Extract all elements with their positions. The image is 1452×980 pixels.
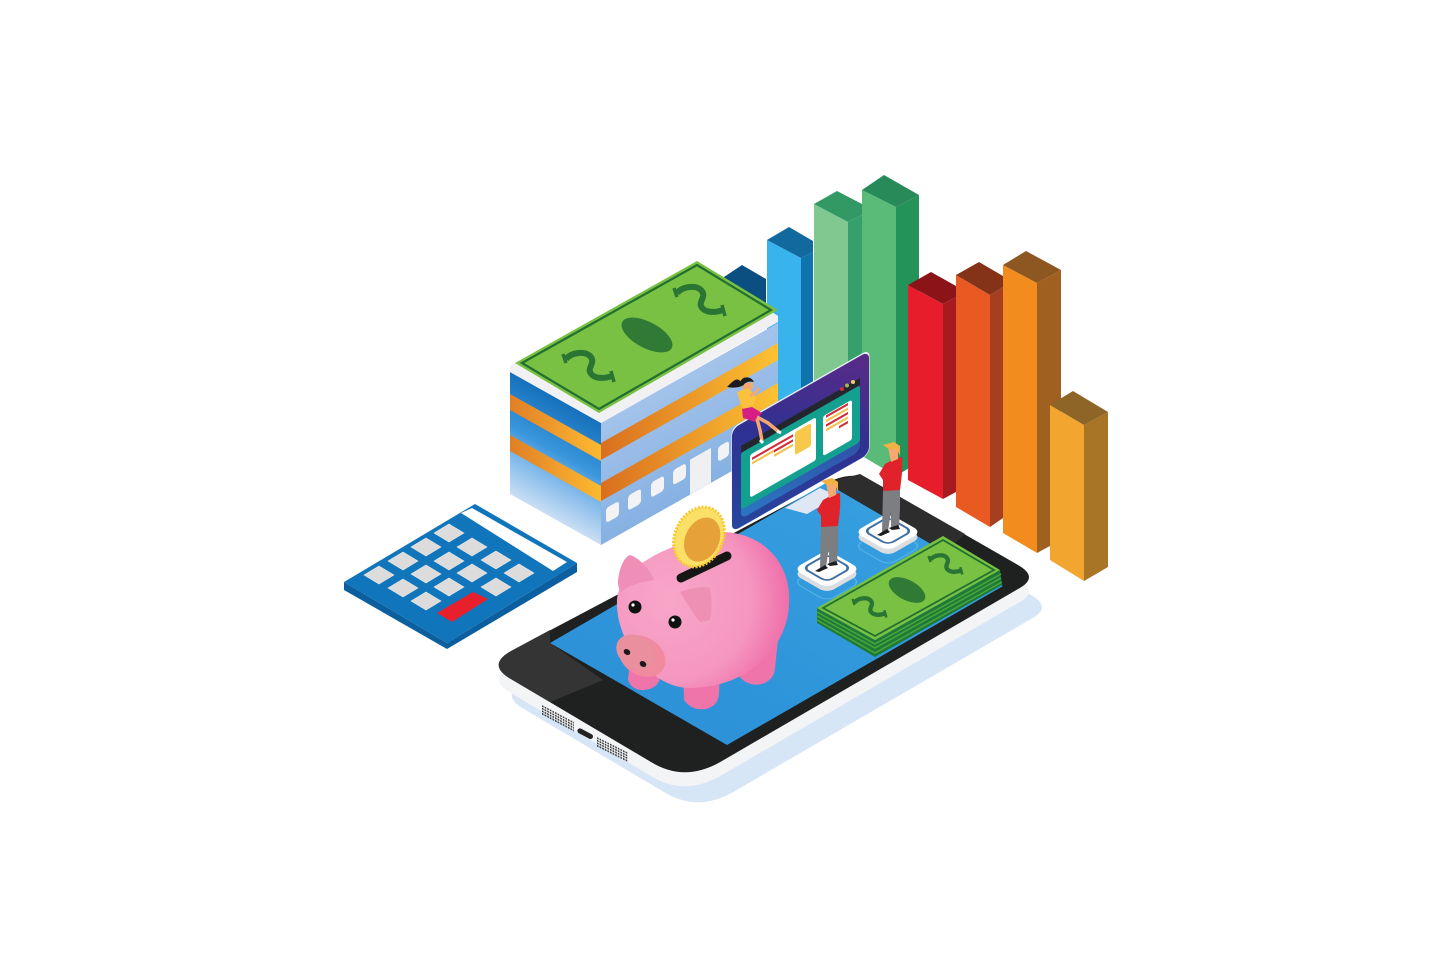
dollar sign — [563, 353, 614, 382]
speaker grille — [597, 737, 628, 762]
oval — [616, 310, 678, 360]
pig left ear — [618, 555, 654, 592]
pig eyes — [628, 600, 682, 628]
monitor — [732, 349, 870, 533]
calculator — [344, 504, 577, 649]
bezel highlight — [826, 474, 965, 552]
building right face with stripes, windows and door — [601, 323, 778, 545]
dollar sign — [674, 287, 725, 316]
coin slot — [681, 556, 727, 578]
building roof slab — [510, 262, 778, 423]
calculator display — [461, 508, 567, 571]
chart: red, orange and yellow bars — [908, 251, 1108, 581]
bar: green — [862, 175, 919, 476]
speaker grille — [542, 705, 574, 732]
chart: blue and green rear bars — [724, 175, 919, 476]
person: woman sitting on the monitor — [727, 377, 781, 443]
window buttons — [840, 380, 855, 391]
main window panel — [750, 417, 816, 498]
platform under first man — [793, 550, 861, 601]
phone body — [499, 490, 1029, 786]
phone face — [499, 476, 1029, 772]
bar: deep orange — [956, 262, 1003, 527]
bar: yellow — [1050, 391, 1108, 581]
calculator keys — [364, 524, 534, 610]
bar: orange — [1003, 251, 1061, 553]
pig right ear — [680, 587, 712, 622]
building left face — [510, 372, 601, 545]
person: man standing right — [877, 442, 902, 536]
bezel highlight — [499, 630, 603, 702]
dollar sign — [929, 555, 962, 574]
calculator red key — [437, 592, 488, 622]
bar: blue — [767, 227, 813, 450]
monitor stand — [785, 488, 838, 514]
top note — [817, 536, 1000, 640]
person: man standing left — [815, 478, 840, 572]
bar: navy — [724, 265, 766, 310]
oval — [885, 572, 929, 608]
bar: red — [908, 272, 956, 499]
dollar sign — [853, 598, 886, 618]
bar: light green — [814, 191, 862, 440]
gold coin — [664, 499, 734, 575]
building — [510, 262, 778, 545]
side window panel — [823, 400, 852, 456]
phone shadow — [512, 506, 1042, 802]
pig snout — [610, 627, 673, 685]
phone screen — [550, 483, 1003, 745]
piggy bank — [610, 499, 789, 709]
pig legs — [628, 640, 778, 709]
smartphone — [499, 474, 1042, 802]
monitor frame — [732, 349, 870, 533]
cash stack on phone — [817, 536, 1002, 657]
pig body — [617, 532, 789, 688]
platform under second man — [854, 513, 922, 565]
banknote on the building — [515, 261, 778, 413]
charging port — [577, 727, 594, 740]
